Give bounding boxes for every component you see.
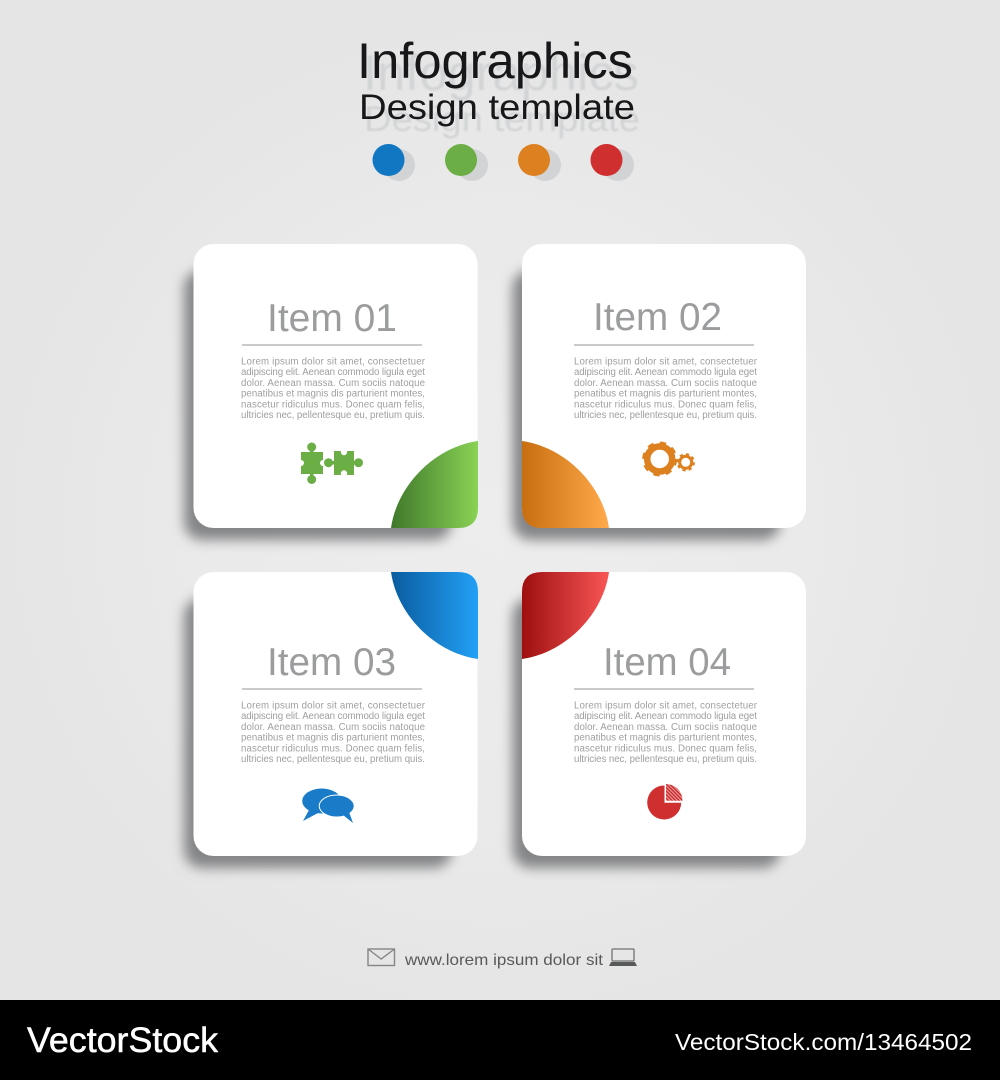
text block: item 02: dolor. Aenean massa. Cum sociis natoque: [574, 378, 757, 389]
panel: item 02: [512, 244, 806, 540]
icon: envelope: [368, 949, 394, 966]
text block: item 04: nascetur ridiculus mus. Donec quam felis,: [574, 744, 757, 754]
text block: item 01: penatibus et magnis dis parturient montes,: [241, 388, 425, 400]
title: Infographics: [357, 33, 633, 89]
corner: blue: [391, 572, 478, 659]
corner: red: [522, 572, 609, 659]
text block: item 01: ultricies nec, pellentesque eu, pretium quis.: [241, 410, 425, 421]
heading: item 02: Item 02: [593, 296, 722, 339]
title shadow: [363, 45, 640, 139]
heading: item 04: Item 04: [603, 641, 731, 684]
text block: item 03: Lorem ipsum dolor sit amet, consectetuer: [241, 700, 426, 712]
heading: item 01: Item 01: [267, 297, 397, 340]
text block: item 03: penatibus et magnis dis parturient montes,: [241, 732, 425, 744]
footer text: www.lorem ipsum dolor sit: [404, 952, 604, 969]
panel: item 03: [184, 572, 478, 868]
text block: item 01: dolor. Aenean massa. Cum sociis natoque: [241, 378, 425, 389]
text block: item 04: penatibus et magnis dis parturient montes,: [574, 732, 757, 744]
text block: item 04: Lorem ipsum dolor sit amet, consectetuer: [574, 700, 758, 712]
title shadow: Infographics: [363, 45, 639, 101]
text block: item 04: [574, 700, 758, 765]
text block: item 01: adipiscing elit. Aenean commodo ligula eget: [241, 367, 425, 378]
text block: item 02: adipiscing elit. Aenean commodo ligula eget: [574, 367, 757, 378]
text block: item 04: adipiscing elit. Aenean commodo ligula eget: [574, 711, 757, 722]
icon: pie chart: [647, 784, 683, 819]
text block: item 02: [574, 356, 758, 421]
text block: item 01: Lorem ipsum dolor sit amet, consectetuer: [241, 356, 426, 368]
corner: orange: [522, 441, 609, 528]
panel: item 01: [184, 244, 478, 540]
icon: laptop: [609, 949, 637, 966]
icon: gears: [644, 444, 694, 474]
text block: item 03: nascetur ridiculus mus. Donec quam felis,: [241, 744, 425, 754]
icon: puzzle: [298, 442, 363, 484]
text block: item 04: ultricies nec, pellentesque eu, pretium quis.: [574, 754, 757, 765]
text block: item 01: [241, 356, 426, 421]
corner: green: [391, 441, 478, 528]
text block: item 01: nascetur ridiculus mus. Donec quam felis,: [241, 400, 425, 410]
colour dots: [372, 144, 634, 181]
heading: item 03: Item 03: [267, 641, 396, 684]
watermark bar: [0, 1000, 1000, 1080]
title shadow: Design template: [364, 100, 640, 139]
url: VectorStock.com/13464502: [675, 1029, 972, 1055]
text block: item 03: [241, 700, 426, 765]
text block: item 03: ultricies nec, pellentesque eu, pretium quis.: [241, 754, 425, 765]
title block: [357, 33, 640, 139]
logo: VectorStock: [27, 1021, 219, 1060]
text block: item 02: Lorem ipsum dolor sit amet, consectetuer: [574, 356, 758, 368]
text block: item 03: adipiscing elit. Aenean commodo ligula eget: [241, 711, 425, 722]
footer contact line: [368, 949, 637, 969]
icon: speech bubbles: [302, 788, 355, 823]
text block: item 03: dolor. Aenean massa. Cum sociis natoque: [241, 722, 425, 733]
subtitle: Design template: [359, 88, 635, 127]
text block: item 04: dolor. Aenean massa. Cum sociis natoque: [574, 722, 757, 733]
text block: item 02: nascetur ridiculus mus. Donec quam felis,: [574, 400, 757, 410]
text block: item 02: ultricies nec, pellentesque eu, pretium quis.: [574, 410, 757, 421]
text block: item 02: penatibus et magnis dis parturient montes,: [574, 388, 757, 400]
panel: item 04: [512, 572, 806, 868]
